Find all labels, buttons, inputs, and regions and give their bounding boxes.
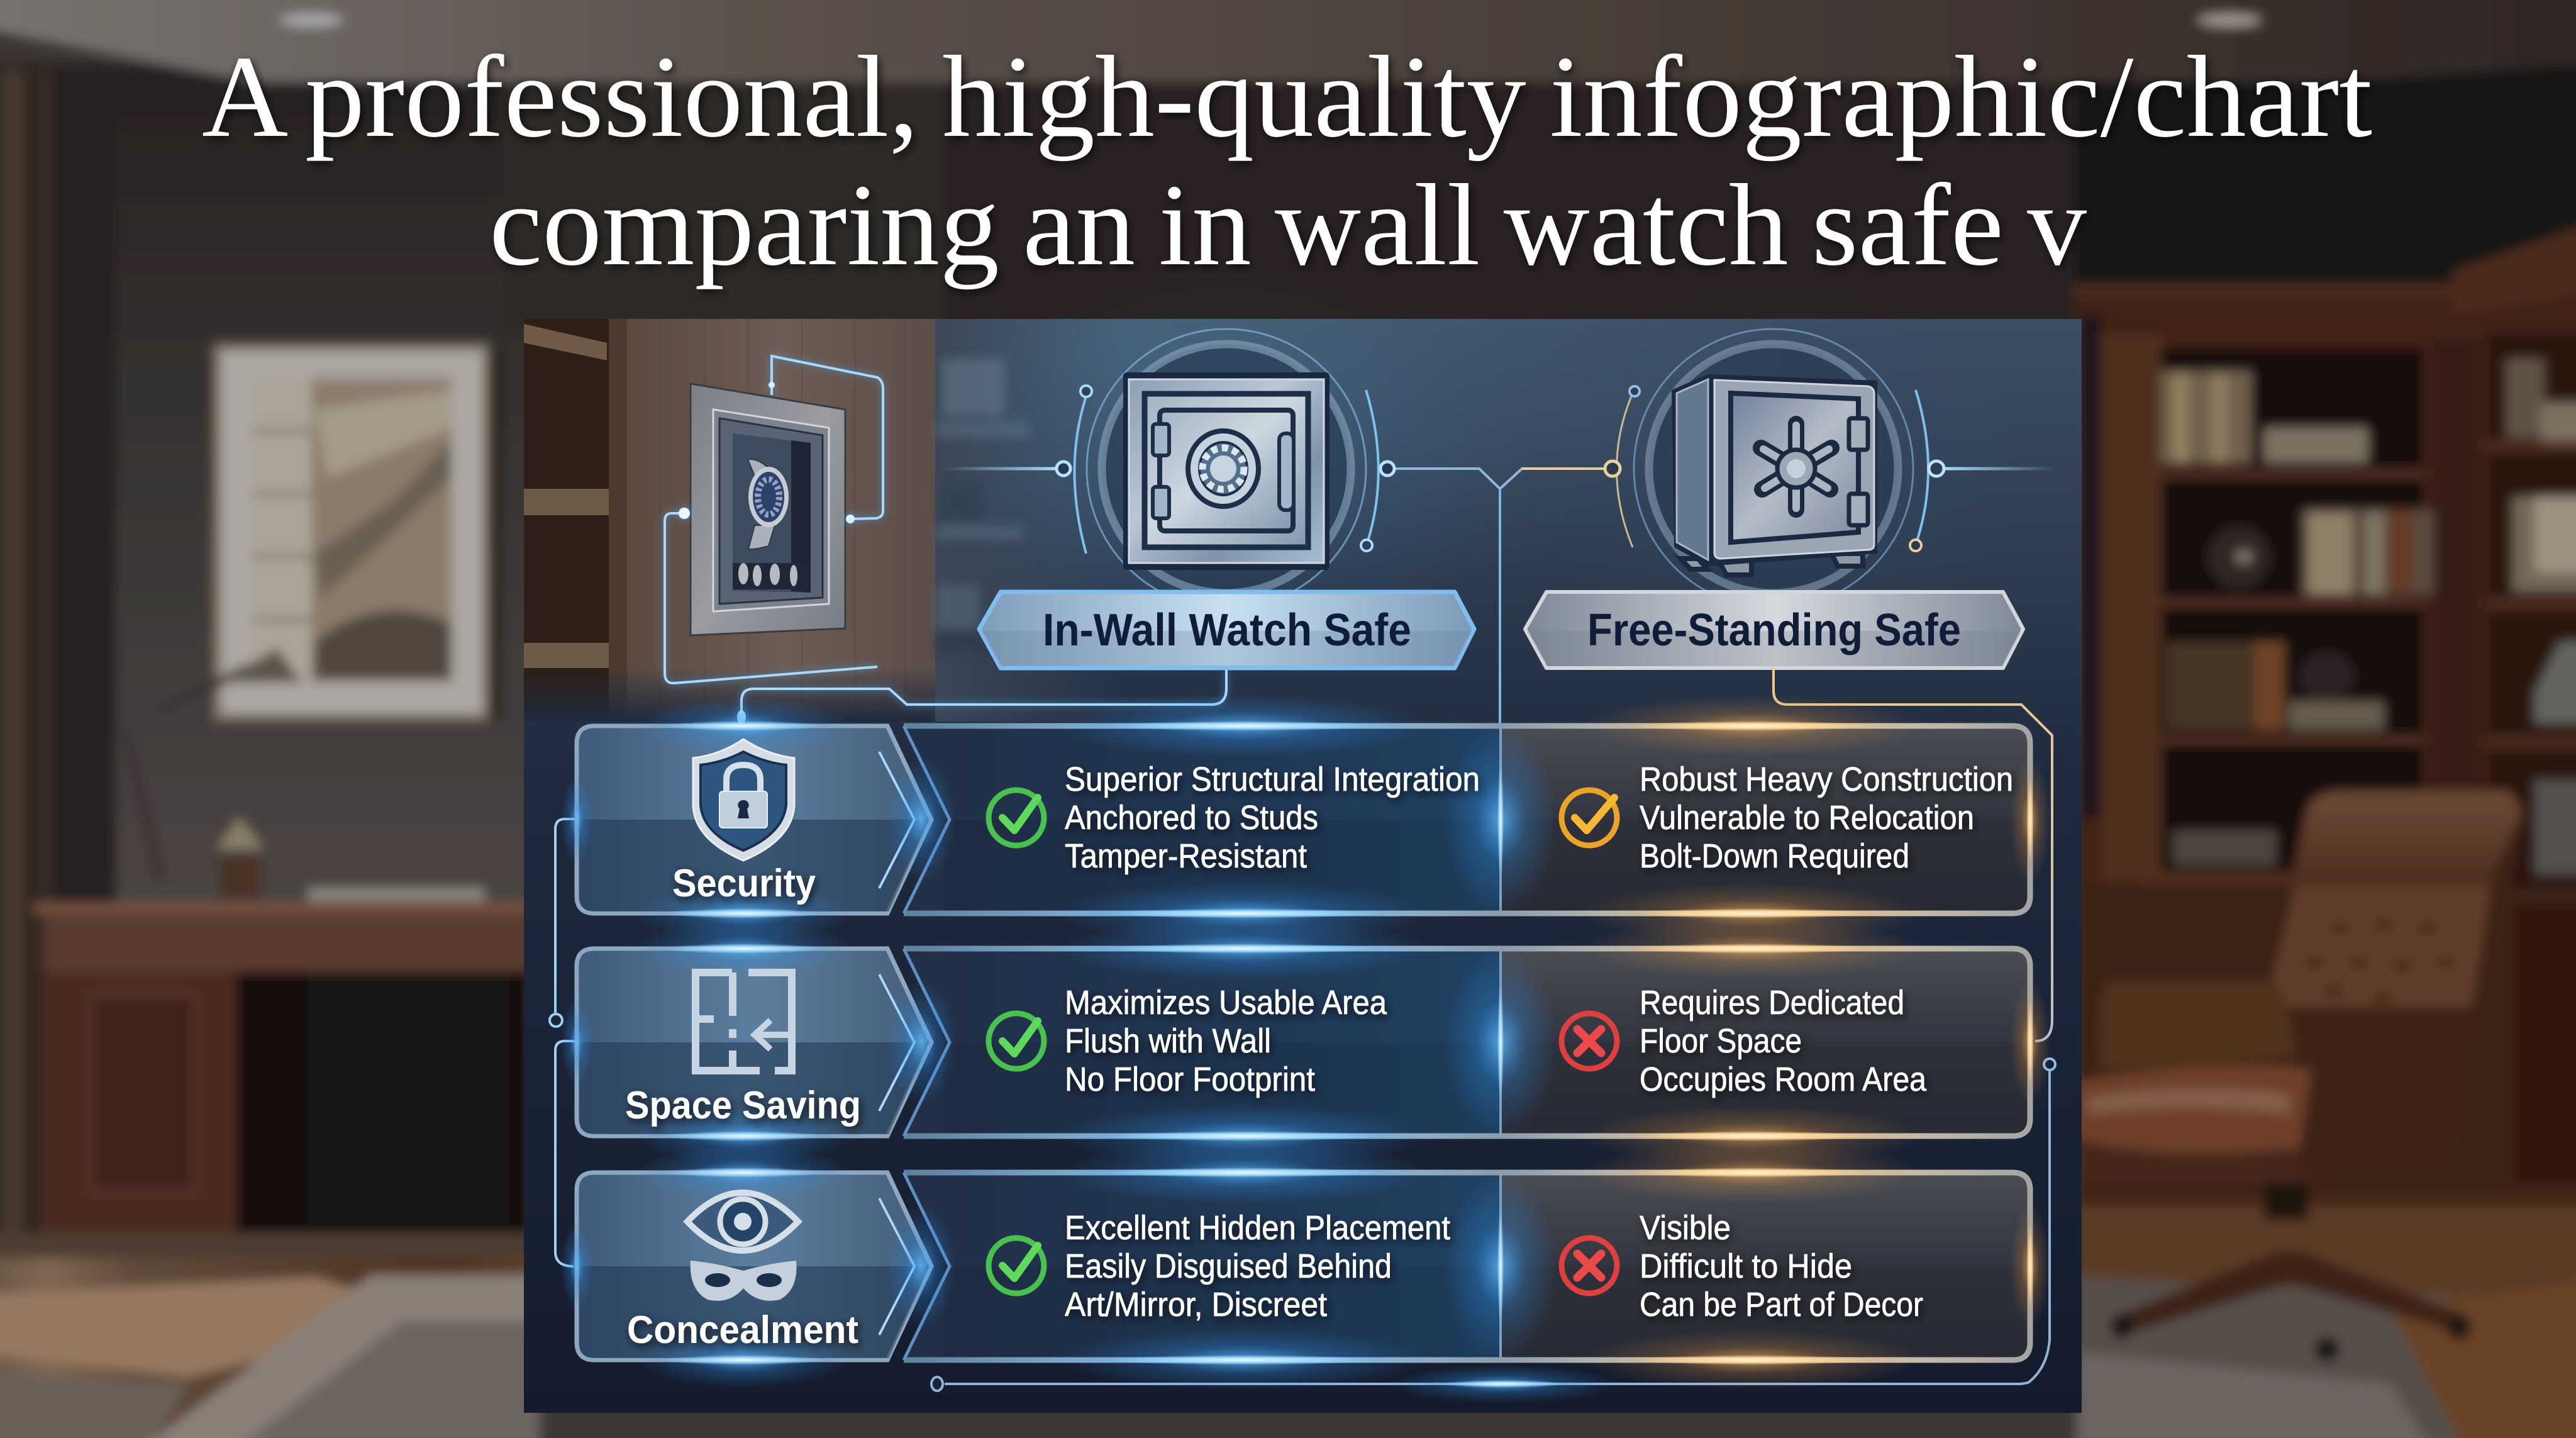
connector: free-standing to rows [550, 668, 2055, 1403]
title: A professional, high-quality infographic/chart [202, 32, 2372, 162]
text: in-wall space saving: Flush with Wall [1065, 1022, 1271, 1060]
panel: infographic card [524, 261, 2082, 1413]
label: Concealment: Concealment [627, 1308, 858, 1352]
text: in-wall space saving [1065, 984, 1387, 1098]
connector lines around niche [665, 356, 1226, 724]
icon: red cross [1562, 1013, 1617, 1069]
icon: in-wall safe emblem [943, 261, 1605, 726]
text: free-standing security: Vulnerable to Relocation [1640, 799, 1974, 837]
text: free-standing space saving [1640, 984, 1927, 1098]
text: in-wall security: Superior Structural Integration [1065, 761, 1480, 798]
picture frame on the wall [214, 344, 503, 720]
label: Security: Security [672, 862, 816, 905]
icon: eye and mask [687, 1193, 798, 1301]
text: in-wall security: Tamper-Resistant [1065, 837, 1307, 875]
desk [34, 903, 531, 913]
label: Space Saving: Space Saving [625, 1084, 861, 1127]
row: space saving [561, 917, 2050, 1168]
text: free-standing space saving: Floor Space [1640, 1022, 1802, 1060]
panel: wall-niche photo [524, 319, 1124, 722]
icon: floor plan [696, 973, 792, 1071]
header: Free-Standing Safe [1525, 592, 2023, 668]
text: free-standing concealment [1640, 1209, 1923, 1324]
title [202, 32, 2372, 290]
header: In-Wall Watch Safe: In-Wall Watch Safe [1043, 605, 1411, 655]
header: In-Wall Watch Safe [979, 592, 1474, 668]
icon: in-wall safe with watch [691, 384, 845, 635]
bookcases [2075, 293, 2576, 1237]
text: free-standing security: Robust Heavy Construction [1640, 761, 2013, 798]
text: free-standing concealment: Difficult to Hide [1640, 1247, 1852, 1285]
icon: amber check [1562, 790, 1617, 845]
text: free-standing space saving: Requires Dedicated [1640, 984, 1904, 1022]
text: in-wall space saving: Maximizes Usable Area [1065, 984, 1387, 1022]
text: free-standing security [1640, 761, 2013, 875]
text: in-wall security [1065, 761, 1480, 875]
text: in-wall security: Anchored to Studs [1065, 799, 1318, 837]
header: Free-Standing Safe: Free-Standing Safe [1587, 605, 1961, 655]
title: comparing an in wall watch safe v [489, 160, 2087, 290]
text: free-standing security: Bolt-Down Required [1640, 837, 1909, 875]
text: free-standing concealment: Can be Part of Decor [1640, 1286, 1923, 1324]
text: free-standing concealment: Visible [1640, 1209, 1731, 1247]
floor right [2075, 1195, 2576, 1438]
icon: red cross [1562, 1238, 1617, 1293]
text: in-wall space saving: No Floor Footprint [1065, 1061, 1315, 1098]
row: concealment [561, 1141, 2050, 1391]
icon: green check [989, 1013, 1044, 1069]
text: in-wall concealment: Easily Disguised Behind [1065, 1247, 1392, 1285]
icon: green check [989, 790, 1044, 845]
desk lamp [126, 667, 252, 881]
leather chair [2075, 791, 2525, 1362]
icon: shield with lock [693, 739, 794, 861]
text: in-wall concealment [1065, 1209, 1450, 1324]
icon: free-standing safe emblem [1522, 267, 2057, 670]
text: in-wall concealment: Excellent Hidden Placement [1065, 1209, 1450, 1247]
row: security [561, 694, 2050, 945]
text: in-wall concealment: Art/Mirror, Discreet [1065, 1286, 1327, 1324]
icon: green check [989, 1238, 1044, 1293]
text: free-standing space saving: Occupies Room Area [1640, 1061, 1927, 1098]
